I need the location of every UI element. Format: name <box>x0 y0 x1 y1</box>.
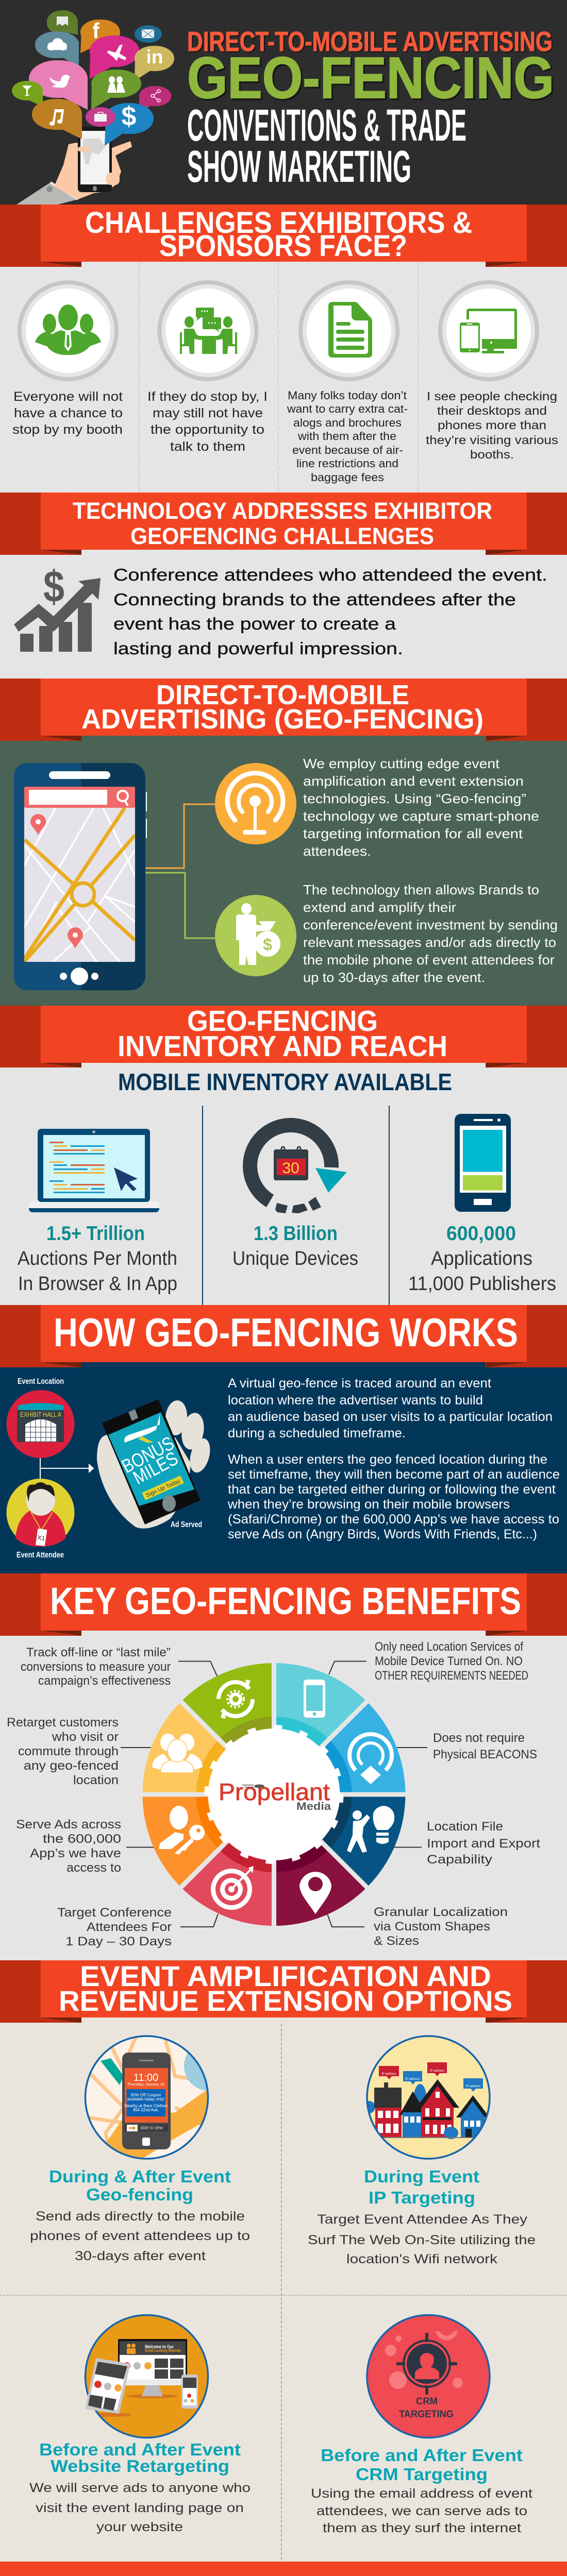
description: attendees, we can serve ads to <box>316 2504 527 2518</box>
description <box>311 2486 532 2535</box>
ip tags: IP address <box>466 2085 480 2088</box>
text: brands: up to 30-days after the event. <box>303 970 485 985</box>
text: brands: the mobile phone of event attendees for <box>303 952 555 968</box>
callout: serve ads: App’s we have <box>30 1846 121 1860</box>
callout: serve ads: Serve Ads across <box>16 1818 121 1832</box>
label: Auctions Per Month <box>18 1248 177 1269</box>
callout: retarget customers: who visit or <box>52 1730 119 1744</box>
stat: 600,000: 600,000 <box>446 1223 516 1245</box>
text: their desktops and <box>437 404 547 417</box>
panel: how it works background <box>0 1362 567 1573</box>
bubble: linkedin <box>135 46 174 81</box>
icon: person and key <box>159 1806 205 1855</box>
heading line 1: GEO-FENCING <box>187 1005 378 1038</box>
description: visit the event landing page on <box>36 2501 244 2515</box>
panel: direct-to-mobile background <box>0 736 567 1006</box>
description: Send ads directly to the mobile <box>36 2209 245 2224</box>
label <box>408 1248 556 1295</box>
callout: target attendees: 1 Day – 30 Days <box>65 1935 172 1948</box>
text: virtual geo-fence: location where the advertiser wants to build <box>228 1393 483 1408</box>
callout: serve ads: the 600,000 <box>43 1832 121 1846</box>
text: technologies: targeting information for all event <box>303 826 523 841</box>
heading <box>49 2167 231 2204</box>
callout: track conversions <box>21 1646 217 1688</box>
description: them as they surf the internet <box>323 2521 521 2535</box>
text: user enters: that can be targeted either during or following the event <box>228 1482 556 1497</box>
icon: event attendee <box>6 1479 74 1547</box>
icon: hand <box>97 1399 213 1529</box>
text: alogs and brochures <box>293 416 402 429</box>
label: 11,000 Publishers <box>408 1273 556 1295</box>
callout: retarget customers <box>7 1716 151 1787</box>
label <box>18 1248 177 1295</box>
description <box>29 2481 251 2534</box>
icon: signal antenna <box>215 763 296 844</box>
column: devices <box>232 1125 358 1269</box>
ip tags: IP address <box>381 2073 396 2076</box>
text <box>12 389 123 437</box>
text: want to carry extra cat- <box>287 402 408 415</box>
text: stop by my booth <box>12 422 123 437</box>
text: I see people checking <box>427 389 557 403</box>
callout: beacons: Does not require <box>433 1731 525 1745</box>
bubble: plane <box>90 36 139 79</box>
icon: people group <box>152 1734 203 1773</box>
description: Surf The Web On-Site utilizing the <box>308 2233 536 2247</box>
icon: 30 day cycle: 30 <box>282 1160 299 1177</box>
icon: target <box>211 1866 254 1910</box>
option: ip targeting <box>308 2036 536 2266</box>
text <box>426 389 558 461</box>
bubble: facebook <box>80 19 120 53</box>
bubble: facebook: f <box>92 19 100 43</box>
icon: phone on map: 11:00 <box>134 2072 158 2083</box>
illustration: phone ad in hand <box>97 1399 213 1529</box>
text: conference attendees: lasting and powerful impression. <box>113 639 403 658</box>
text: technologies: amplification and event extension <box>303 773 524 789</box>
bubble: dollar <box>105 101 154 146</box>
icon: laptop <box>29 1129 159 1212</box>
text: virtual geo-fence: during a scheduled timeframe. <box>228 1426 406 1440</box>
banner: direct-to-mobile <box>0 679 567 741</box>
callout: serve ads: access to <box>66 1861 121 1875</box>
icon: phone on map: Thursday, January 23 <box>127 2082 164 2087</box>
text <box>147 389 268 454</box>
bubble: suitcase <box>86 107 115 127</box>
text: brands: conference/event investment by sending <box>303 917 558 933</box>
callout: location services: Mobile Device Turned On. NO <box>375 1654 523 1668</box>
column: catalogs and brochures <box>287 280 408 484</box>
column: auctions <box>18 1129 177 1295</box>
description: your website <box>96 2520 183 2534</box>
text: technologies: technology we capture smart-phone <box>303 808 539 824</box>
icon: map pins <box>30 814 83 948</box>
footer <box>0 2562 567 2576</box>
text: brands: relevant messages and/or ads directly to <box>303 935 556 950</box>
callout: granular localization: via Custom Shapes <box>374 1920 490 1934</box>
connector: green <box>145 873 215 938</box>
text: event because of air- <box>292 444 403 456</box>
text: talk to them <box>170 439 245 454</box>
icon: airplane <box>124 1414 160 1443</box>
panel: challenges background <box>0 262 567 493</box>
icon: crm crosshair: TARGETING <box>399 2409 454 2420</box>
icon: person with money bag <box>215 895 296 976</box>
bubble: dollar: $ <box>122 101 137 131</box>
callout: track conversions: conversions to measure your <box>21 1660 171 1674</box>
banner: technology addresses <box>0 493 567 555</box>
callout: serve ads <box>16 1818 154 1875</box>
text: booths. <box>470 448 514 461</box>
text: virtual geo-fence <box>228 1376 553 1440</box>
stat: 1.5+ trillion: 1.5+ Trillion <box>46 1223 145 1245</box>
icon: hand <box>54 141 132 199</box>
description: location's Wifi network <box>346 2252 498 2266</box>
ad text: miles: MILES <box>130 1448 181 1488</box>
icon: phone <box>304 1680 325 1718</box>
bubble: linkedin: in <box>146 46 163 67</box>
icon: phone on map: Nearby at Bare Clothes <box>124 2104 168 2108</box>
ad strip: sign up today: Sign Up Today <box>145 1478 181 1499</box>
callout: location services: Only need Location Services of <box>375 1640 523 1654</box>
icon: responsive website devices: Great Looking Website <box>145 2348 181 2353</box>
bubble: twitter <box>29 60 88 110</box>
text: user enters: when they’re browsing on their mobile browsers <box>227 1497 510 1512</box>
bubble: cocktail <box>12 81 43 107</box>
banner: challenges <box>0 205 567 267</box>
icon: meeting <box>158 280 259 381</box>
text <box>287 389 408 484</box>
text: Many folks today don’t <box>288 389 407 402</box>
description: We will serve ads to anyone who <box>29 2481 251 2495</box>
column: opportunity to talk <box>147 280 268 454</box>
icon: exhibit hall: EXHIBIT HALL A <box>20 1411 61 1418</box>
icon: document <box>298 280 399 381</box>
text: virtual geo-fence: A virtual geo-fence is traced around an event <box>228 1376 491 1391</box>
text: may still not have <box>153 406 263 420</box>
description: Using the email address of event <box>311 2486 532 2501</box>
text: Everyone will not <box>13 389 123 404</box>
text: virtual geo-fence: an audience based on user visits to a particular location <box>228 1410 553 1424</box>
heading: CRM Targeting <box>356 2465 488 2484</box>
bubble: music <box>32 99 82 139</box>
icon: crm crosshair: CRM <box>416 2396 438 2407</box>
text: phones more than <box>438 418 546 432</box>
callouts: benefit labels <box>7 1640 540 1948</box>
heading line 1: CHALLENGES EXHIBITORS & <box>85 206 472 240</box>
callout: location file: Location File <box>427 1820 503 1834</box>
callout: retarget customers: Retarget customers <box>7 1716 119 1730</box>
icon: smartphone <box>455 1114 511 1212</box>
callout: retarget customers: location <box>73 1773 119 1787</box>
icon: houses with ip tags <box>363 2036 490 2159</box>
panel: inventory background <box>0 1063 567 1306</box>
text: with them after the <box>297 430 396 443</box>
option: geo-fencing <box>30 2035 250 2263</box>
callout: track conversions: campaign’s effectiveness <box>38 1674 171 1688</box>
text: conference attendees <box>113 565 547 658</box>
stat: 1.3 billion: 1.3 Billion <box>254 1223 338 1245</box>
text: they’re visiting various <box>426 433 558 447</box>
heading <box>39 2440 241 2476</box>
text: user enters <box>227 1452 560 1541</box>
description <box>30 2209 250 2263</box>
text: If they do stop by, I <box>147 389 268 404</box>
callout: granular localization: & Sizes <box>374 1934 419 1948</box>
ip tags: IP address <box>405 2078 420 2081</box>
icon: phone on map <box>85 2035 209 2160</box>
icon: refresh gear <box>219 1680 253 1719</box>
callout: location services <box>329 1640 528 1683</box>
icon: responsive website devices <box>85 2315 208 2438</box>
column: applications <box>408 1114 556 1295</box>
label: Applications <box>431 1248 532 1269</box>
text: have a chance to <box>14 406 123 420</box>
callout: target attendees: Target Conference <box>57 1906 172 1920</box>
banner: event amplification <box>0 1960 567 2023</box>
banner: key benefits <box>0 1573 567 1636</box>
icon: exhibit hall <box>6 1390 74 1458</box>
callout: granular localization: Granular Localization <box>374 1905 508 1919</box>
description: phones of event attendees up to <box>30 2229 250 2243</box>
heading: During Event <box>364 2167 479 2186</box>
heading: IP Targeting <box>369 2188 475 2207</box>
heading line 1: TECHNOLOGY ADDRESSES EXHIBITOR <box>73 498 492 524</box>
ip tags <box>379 2062 483 2092</box>
illustration: hand holding phone with social bubbles <box>12 10 174 205</box>
panel: header <box>0 0 567 205</box>
arrow: connector to phone <box>40 1458 93 1479</box>
text: technologies: We employ cutting edge event <box>303 756 500 771</box>
bubble: people <box>91 70 141 110</box>
banner: how geo-fencing works <box>0 1305 567 1367</box>
heading: Geo-fencing <box>86 2185 193 2204</box>
text: baggage fees <box>311 471 384 484</box>
icon: rising chart with dollar: $ <box>43 562 64 612</box>
bubble: mail <box>135 25 162 43</box>
heading: During & After Event <box>49 2167 231 2186</box>
connector: orange <box>145 804 215 868</box>
label: ad served: Ad Served <box>171 1520 202 1529</box>
icon: rising chart with dollar <box>14 562 101 652</box>
callout: location file <box>394 1820 540 1867</box>
wheel segments <box>141 1662 407 1927</box>
callout: beacons: Physical BEACONS <box>433 1748 537 1761</box>
callout: target attendees <box>57 1906 218 1948</box>
chart: benefits wheel <box>141 1662 407 1927</box>
icon: person and puzzle bulb <box>347 1806 394 1853</box>
text: conference attendees: Conference attendees who attendeed the event. <box>113 565 547 584</box>
heading: Before and After Event <box>321 2446 523 2465</box>
text: the opportunity to <box>151 422 264 437</box>
callout: location file: Capability <box>427 1853 492 1867</box>
panel: options background <box>0 2018 567 2562</box>
text: user enters: (Safari/Chrome) or the 600,000 App’s we have access to <box>228 1512 559 1527</box>
banner: inventory <box>0 1005 567 1067</box>
ad text: bonus: BONUS <box>119 1432 177 1477</box>
icon: map pin <box>299 1872 331 1914</box>
icon: person with money bag: $ <box>263 935 272 954</box>
icon: event attendee: X1 <box>37 1534 46 1542</box>
description <box>308 2212 536 2266</box>
heading line 2: INVENTORY AND REACH <box>118 1030 447 1063</box>
heading <box>364 2167 479 2207</box>
heading <box>321 2446 523 2484</box>
text: line restrictions and <box>296 457 398 470</box>
label: event attendee: Event Attendee <box>16 1551 64 1560</box>
bubble: cloud <box>35 31 79 67</box>
option: crm targeting <box>311 2315 532 2535</box>
icon: devices <box>438 280 539 381</box>
icon: responsive website devices: Welcome to Our <box>145 2344 174 2349</box>
logo: propellant media: Propellant <box>219 1778 330 1805</box>
heading: mobile inventory: MOBILE INVENTORY AVAILABLE <box>118 1069 452 1095</box>
label: Unique Devices <box>232 1248 358 1269</box>
text: conference attendees: Connecting brands to the attendees after the <box>113 590 516 609</box>
ip tags: IP address <box>430 2070 444 2073</box>
label: In Browser & In App <box>18 1273 177 1295</box>
text: brands: The technology then allows Brands to <box>303 882 539 897</box>
bubble: share <box>139 86 171 112</box>
label: event location: Event Location <box>18 1377 64 1386</box>
callout: granular localization <box>327 1905 508 1948</box>
text: technologies <box>303 756 539 859</box>
heading line 2: REVENUE EXTENSION OPTIONS <box>59 1985 512 2017</box>
icon: phone on map: 454 22nd Ave. <box>132 2108 159 2112</box>
text: user enters: serve Ads on (Angry Birds, Words With Friends, Etc...) <box>228 1527 537 1541</box>
text: conference attendees: event has the power to create a <box>113 614 396 633</box>
callout: track conversions: Track off-line or “last mile” <box>26 1646 171 1659</box>
heading line 1: EVENT AMPLIFICATION AND <box>80 1960 491 1992</box>
icon: phone on map: available today only! <box>127 2097 164 2102</box>
logo: propellant media: Media <box>296 1801 331 1812</box>
icon: phone on map: 50% Off Coupon <box>130 2093 161 2097</box>
text: user enters: set timeframe, they will then become part of an audience <box>228 1467 560 1482</box>
panel: technology background <box>0 550 567 679</box>
text: brands <box>303 882 558 985</box>
icon: sleeve <box>16 182 78 205</box>
icon: 30 day cycle <box>250 1125 347 1213</box>
bubble: bookmark <box>47 10 78 35</box>
heading: Before and After Event <box>39 2440 241 2459</box>
column: booth visitors <box>12 280 123 437</box>
heading line 2: GEOFENCING CHALLENGES <box>130 523 434 549</box>
icon: business people <box>18 280 119 381</box>
callout: target attendees: Attendees For <box>87 1920 172 1934</box>
heading line 2: SPONSORS FACE? <box>159 229 407 263</box>
description: Target Event Attendee As They <box>317 2212 528 2227</box>
callout: retarget customers: any geo-fenced <box>24 1759 119 1773</box>
icon: phone body <box>102 1399 201 1524</box>
icon: phone on map: slide to view <box>140 2125 163 2131</box>
text: technologies: attendees. <box>303 843 371 859</box>
text: brands: extend and amplify their <box>303 900 456 915</box>
callout: beacons <box>397 1731 537 1761</box>
description: 30-days after event <box>75 2249 206 2263</box>
panel: benefits background <box>0 1631 567 1960</box>
callout: location file: Import and Export <box>427 1837 540 1851</box>
callout: retarget customers: commute through <box>18 1744 119 1758</box>
icon: crm crosshair <box>367 2315 490 2438</box>
column: desktops and phones <box>426 280 558 461</box>
icon: phone <box>78 127 120 192</box>
text: technologies: technologies. Using “Geo-fencing” <box>303 791 526 806</box>
heading: Website Retargeting <box>51 2456 229 2476</box>
text: user enters: When a user enters the geo fenced location during the <box>228 1452 547 1467</box>
option: website retargeting <box>29 2315 251 2534</box>
illustration: phone with map <box>14 763 147 990</box>
heading line 1: DIRECT-TO-MOBILE <box>156 680 409 710</box>
heading line 2: ADVERTISING (GEO-FENCING) <box>81 704 483 735</box>
icon: beacon <box>349 1734 392 1784</box>
